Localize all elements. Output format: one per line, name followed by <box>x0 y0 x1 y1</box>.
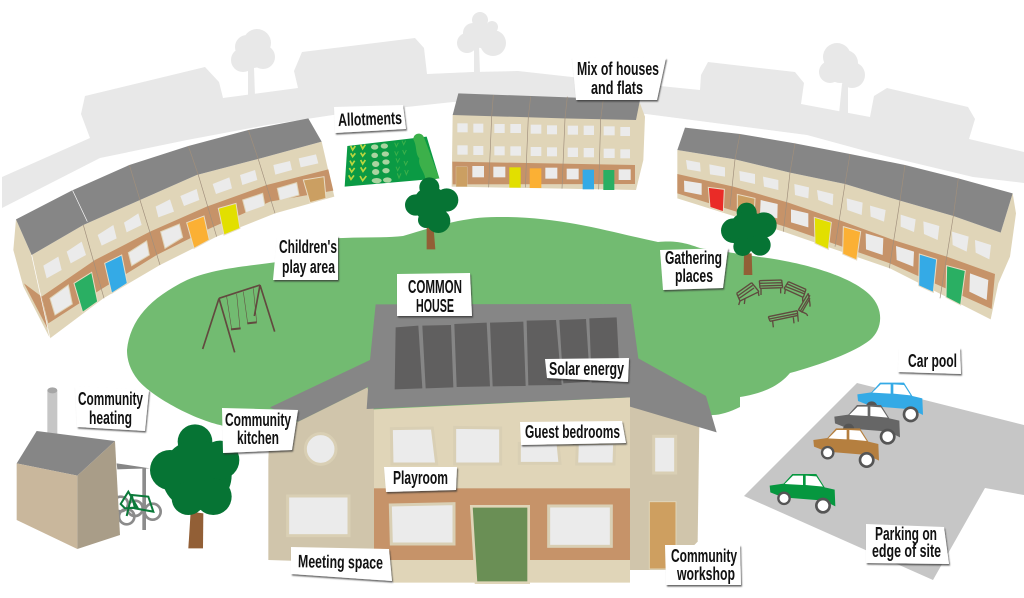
label: Mix of houses and flats <box>572 57 666 100</box>
heating roof <box>17 431 115 476</box>
label: Solar energy <box>545 358 629 382</box>
tree near allotments <box>405 177 458 249</box>
community heating building <box>17 387 239 549</box>
label: Car pool <box>898 348 961 374</box>
right terrace of houses <box>677 128 1016 319</box>
bench 1 <box>737 283 759 305</box>
main roof <box>367 304 717 432</box>
car: brown <box>813 428 879 467</box>
solar panels <box>395 317 620 389</box>
bike shelter <box>117 463 150 530</box>
car: blue <box>857 383 923 421</box>
label: Parking on edge of site: edge of site <box>872 541 941 561</box>
left wing wall <box>268 387 374 563</box>
car: grey <box>834 405 900 443</box>
left terrace doors <box>74 177 326 312</box>
brick band <box>374 488 630 560</box>
label: Community workshop <box>665 545 741 585</box>
left terrace brick band <box>42 169 333 323</box>
car: green <box>770 474 835 512</box>
bench 4 <box>798 293 810 316</box>
right terrace roof <box>677 128 1013 233</box>
label: Children's play area: play area <box>282 257 336 277</box>
allotment crops <box>349 145 366 181</box>
label: Community workshop: Community <box>671 546 737 566</box>
large tree <box>150 424 239 548</box>
background: distant houses and trees silhouette <box>2 12 1024 208</box>
label: Solar energy: Solar energy <box>549 359 624 379</box>
label: Mix of houses and flats: Mix of houses <box>577 59 659 79</box>
label: Gathering places <box>660 248 728 290</box>
bicycles <box>113 492 161 524</box>
label: Allotments: Allotments <box>338 108 402 130</box>
label: Children's play area: Children's <box>279 237 337 257</box>
label: COMMON HOUSE: HOUSE <box>416 296 454 316</box>
label: Community kitchen <box>222 408 298 453</box>
centre terrace brick band <box>452 162 635 184</box>
right terrace doors <box>708 187 965 305</box>
cars <box>770 383 923 512</box>
left wing roof <box>270 360 373 422</box>
right wing wall <box>630 403 699 570</box>
label: Mix of houses and flats: and flats <box>591 78 643 98</box>
label: COMMON HOUSE: COMMON <box>408 277 462 297</box>
centre terrace of houses <box>452 93 645 190</box>
bench 2 <box>759 280 783 295</box>
label: Children's play area <box>273 236 338 280</box>
centre terrace windows <box>457 123 631 180</box>
bench 5 <box>768 311 798 327</box>
label: Car pool: Car pool <box>908 351 957 371</box>
left terrace of houses <box>13 118 334 338</box>
label: Playroom: Playroom <box>393 468 448 488</box>
label: Allotments <box>334 105 406 133</box>
label: Meeting space: Meeting space <box>298 551 383 573</box>
label: Community kitchen: Community <box>225 410 291 430</box>
label: Community heating: Community <box>78 389 143 409</box>
tree near gathering places <box>721 203 777 275</box>
common house front door <box>471 506 529 583</box>
left terrace windows <box>43 154 318 315</box>
common house building <box>268 304 717 583</box>
right terrace windows <box>684 160 991 300</box>
label: Community workshop: workshop <box>676 564 735 584</box>
label: Parking on edge of site <box>866 524 949 564</box>
heating side wall <box>77 441 120 549</box>
bench 3 <box>784 282 806 302</box>
label: Community kitchen: kitchen <box>237 428 279 448</box>
label: Playroom <box>384 467 457 492</box>
label: COMMON HOUSE <box>397 273 472 316</box>
common house windows <box>288 427 676 546</box>
label: Gathering places: Gathering <box>665 248 722 268</box>
workshop door <box>649 502 676 569</box>
heating front wall <box>17 463 77 549</box>
right terrace brick band <box>677 174 995 309</box>
main wall <box>374 397 630 583</box>
label: Community heating <box>75 386 149 431</box>
label: Gathering places: places <box>675 266 713 286</box>
label: Community heating: heating <box>89 408 132 428</box>
label: Meeting space <box>291 547 392 581</box>
central green space <box>127 217 880 450</box>
centre terrace roof <box>453 93 640 120</box>
right terrace wall <box>677 150 1016 319</box>
label: Parking on edge of site: Parking on <box>875 524 937 544</box>
gathering benches <box>737 280 810 327</box>
swing set <box>203 285 275 352</box>
chimney <box>47 387 57 449</box>
allotments plot <box>345 134 439 187</box>
centre terrace doors <box>456 167 614 190</box>
centre terrace wall <box>452 103 645 190</box>
parking area <box>744 383 1024 580</box>
left terrace wall <box>13 142 334 338</box>
left terrace roof <box>16 118 322 255</box>
label: Guest bedrooms <box>520 421 626 445</box>
label: Guest bedrooms: Guest bedrooms <box>525 422 620 442</box>
